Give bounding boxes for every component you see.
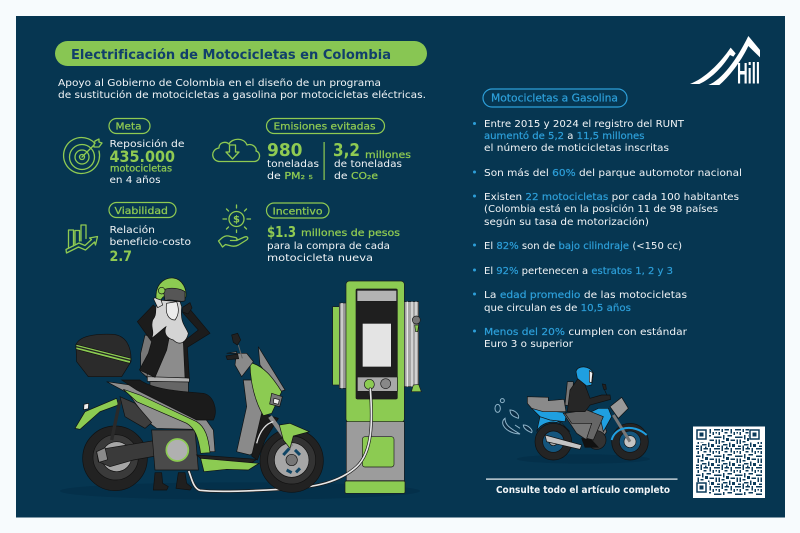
text: Hill — [737, 58, 760, 90]
fact: RUNT registry: el número de moticicletas inscritas — [484, 142, 669, 154]
fact: average age: La edad promedio de las motocicletas — [484, 290, 687, 301]
title banner — [55, 41, 427, 66]
heading: Motocicletas a Gasolina: Motocicletas a Gasolina — [491, 92, 618, 104]
block: Viabilidad: Viabilidad — [114, 206, 168, 217]
fact: average age: que circulan es de 10,5 años — [484, 303, 631, 314]
block: Meta: Reposición de — [110, 138, 184, 150]
fact: motorization rate — [473, 192, 739, 228]
block: Emisiones evitadas: de PM₂ ₅ — [267, 171, 313, 182]
block: Meta: en 4 años — [110, 175, 160, 186]
block: Incentivo: millones de pesos — [301, 228, 400, 239]
block: Emisiones evitadas: millones — [365, 150, 411, 161]
block: Meta: motocicletas — [110, 164, 172, 174]
fact: RUNT registry: aumentó de 5,2 a 11,5 millones — [484, 130, 644, 142]
icon: cloud with down arrow — [213, 139, 260, 162]
block: Emisiones evitadas: Emisiones evitadas — [274, 122, 376, 133]
block: Viabilidad: beneficio-costo — [110, 237, 191, 248]
charging cable — [189, 389, 371, 491]
icon: dollar coin over hand: $ — [233, 214, 240, 226]
block: Incentivo: $1.3 — [267, 223, 296, 241]
block: Incentivo: motocicleta nueva — [267, 253, 373, 264]
list: gasoline motorcycle facts — [473, 119, 742, 350]
block: Viabilidad: Relación — [110, 224, 155, 236]
icon: target with arrow — [64, 137, 102, 173]
footer: call to read the article: Consulte todo el artículo completo — [496, 484, 670, 496]
intro text — [58, 78, 426, 101]
fact: low displacement: El 82% son de bajo cilindraje (<150 cc) — [484, 241, 682, 252]
block: Meta: 435.000 — [110, 147, 175, 166]
QR code — [693, 426, 765, 498]
fact: RUNT registry — [473, 119, 685, 154]
fact: average age — [473, 290, 687, 314]
block: Emisiones evitadas: de CO₂e — [334, 171, 378, 182]
block: Incentivo: Incentivo — [272, 206, 322, 218]
intro text: Apoyo al Gobierno de Colombia en el diseño de un programa — [58, 78, 381, 89]
heading: Motocicletas a Gasolina — [483, 89, 627, 107]
block: Emisiones evitadas: 3,2 — [333, 140, 360, 161]
top case — [76, 334, 131, 377]
rider — [137, 278, 210, 490]
block: Incentivo: para la compra de cada — [267, 241, 390, 252]
charging station — [333, 281, 421, 493]
block: Incentivo — [266, 203, 400, 264]
fact: motorization rate: (Colombia está en la posición 11 de 98 países — [484, 203, 718, 215]
fact: Euro 3 standard — [473, 326, 688, 350]
fact: RUNT registry: Entre 2015 y 2024 el registro del RUNT — [484, 119, 685, 130]
exhaust smoke — [495, 399, 532, 434]
icon: bar chart with rising arrow — [66, 225, 98, 253]
block: Emisiones evitadas: 980 — [267, 140, 302, 161]
scooter — [75, 333, 323, 492]
motorcycle — [527, 367, 648, 460]
block: Meta — [109, 118, 184, 186]
fact: motorization rate: Existen 22 motocicletas por cada 100 habitantes — [484, 192, 739, 203]
fact: Euro 3 standard: Menos del 20% cumplen con estándar — [484, 326, 688, 338]
icon: dollar coin over hand — [218, 205, 250, 247]
fact: socioeconomic strata: El 92% pertenecen a estratos 1, 2 y 3 — [484, 266, 673, 277]
ground shadow — [517, 454, 650, 464]
block: Viabilidad: 2.7 — [110, 249, 132, 265]
illustration: gasoline motorcycle with rider — [495, 367, 650, 464]
block: Emisiones evitadas — [266, 118, 411, 182]
illustration: rider, electric scooter and charging station — [60, 278, 421, 500]
fact: motorization rate: según su tasa de motorización) — [484, 216, 649, 228]
intro text: de sustitución de motocicletas a gasolina por motocicletas eléctricas. — [58, 89, 426, 101]
block: Emisiones evitadas: de toneladas — [334, 159, 402, 170]
fact: Euro 3 standard: Euro 3 o superior — [484, 339, 574, 350]
fact: share of fleet: Son más del 60% del parque automotor nacional — [484, 167, 742, 179]
block: Viabilidad — [109, 202, 191, 265]
block: Emisiones evitadas: toneladas — [267, 159, 319, 170]
logo: Hill mountains — [690, 36, 760, 90]
title banner: Electrificación de Motocicletas en Colombia — [71, 47, 391, 63]
ground shadow — [60, 482, 420, 500]
block: Meta: Meta — [116, 122, 142, 132]
